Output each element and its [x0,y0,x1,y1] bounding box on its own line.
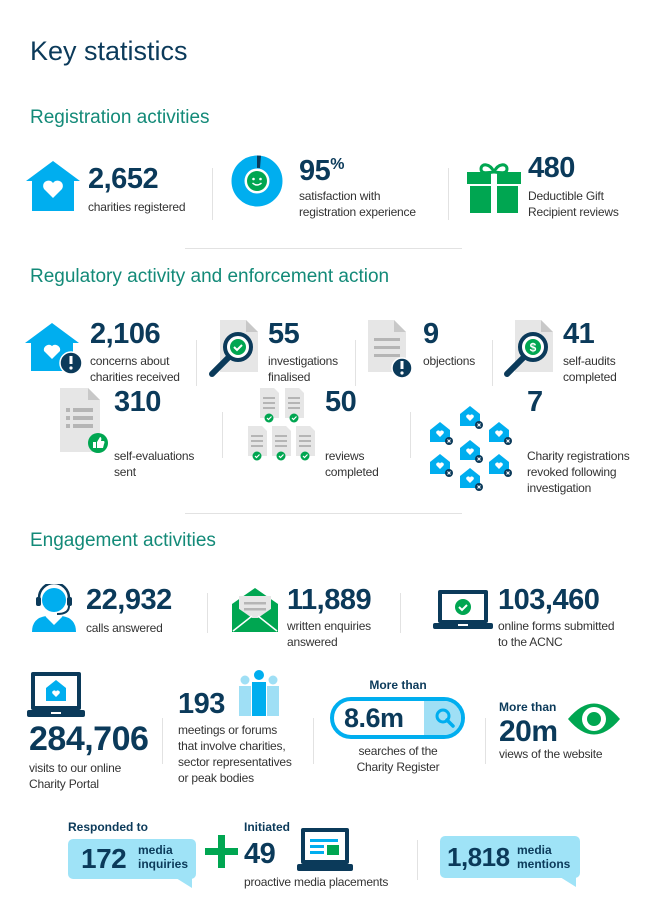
stat: 50 reviews: 50 [325,386,356,418]
icon: headset person [32,584,76,632]
heading: registration activities: Registration activities [30,107,210,128]
icon: houses cluster [430,406,512,491]
stat: 284,706 visits [27,672,148,791]
stat: 284,706 visits: Charity Portal [29,777,99,791]
icon: eye [568,704,620,734]
stat: 49 placements: 49 [244,838,275,870]
stat: 41 self-audits: self-audits [563,354,616,368]
icon: plus [205,835,238,868]
stat: 193 meetings: sector representatives [178,755,292,769]
stat: 103,460 forms: 103,460 [498,584,599,616]
stat: 193 meetings: that involve charities, [178,739,285,753]
stat: 22,932 calls: 22,932 [86,584,172,616]
stat: 1,818 media mentions: media [517,843,552,857]
stat: 193 meetings: or peak bodies [178,771,254,785]
stat: 20m views: 20m [499,715,558,748]
title: Key statistics [30,36,188,66]
stat: 310 self-evaluations: sent [114,465,136,479]
icon: laptop house [27,672,85,717]
stat: 310 self-evaluations: self-evaluations [114,449,194,463]
stat: 22,932 calls [32,584,172,635]
stat: 50 reviews: reviews [325,449,364,463]
icon: doc alert [368,320,412,378]
stat: 55 investigations: finalised [268,370,310,384]
stat: 1,818 media mentions [440,836,580,887]
icon: laptop article [297,828,353,871]
stat: 11,889 written: answered [287,635,337,649]
stat: 103,460 forms: to the ACNC [498,635,562,649]
stat: 55 investigations [209,318,338,384]
stat: 7 revoked: 7 [527,386,543,418]
heading: regulatory: Regulatory activity and enforcement action [30,266,389,287]
icon: doc magnifier dollar [504,320,553,377]
stat: 310 self-evaluations: 310 [114,386,161,418]
stat: 41 self-audits [504,318,617,384]
icon: gift [467,163,521,213]
stat: 7 revoked: revoked following [527,465,616,479]
stat: 11,889 written: written enquiries [287,619,371,633]
stat: 9 objections [368,318,475,378]
stat: 7 revoked [430,386,630,495]
stat: DGR reviews: Recipient reviews [528,205,619,219]
stat: 103,460 forms [433,584,614,649]
stat: 95% satisfaction [232,155,416,219]
stat: charities registered [26,161,185,214]
stat: 172 media inquiries: inquiries [138,857,188,871]
stat: DGR reviews: 480 [528,152,575,184]
stat: 7 revoked: investigation [527,481,591,495]
stat: 193 meetings [178,670,292,785]
stat: 2,106 concerns: concerns about [90,354,169,368]
heading: engagement: Engagement activities [30,530,216,551]
icon: people [239,670,279,716]
stat: 11,889 written: 11,889 [287,584,371,616]
stat: 49 placements [244,820,388,889]
stat: 95% satisfaction: satisfaction with [299,189,380,203]
callout bubble [68,839,196,879]
stat: 55 investigations: 55 [268,318,299,350]
stat: charities registered: charities registered [88,200,185,214]
stat: 284,706 visits: visits to our online [29,761,121,775]
stat: 2,106 concerns: charities received [90,370,180,384]
stat: 8.6m searches: More than [369,678,427,692]
stat: 50 reviews [248,386,379,479]
stat: 103,460 forms: online forms submitted [498,619,614,633]
stat: 284,706 visits: 284,706 [29,720,148,758]
stat: 172 media inquiries: Responded to [68,820,148,834]
stat: 11,889 written [232,584,371,649]
icon: doc thumbs up [60,388,108,453]
stat: 172 media inquiries [68,820,196,888]
stat: 20m views: More than [499,700,556,714]
icon: laptop check [433,590,493,629]
stat: DGR reviews: Deductible Gift [528,189,604,203]
stat: 172 media inquiries: media [138,843,173,857]
stat: 49 placements: Initiated [244,820,290,834]
icon: search pill [330,697,465,739]
stat: 49 placements: proactive media placements [244,875,388,889]
stat: 310 self-evaluations [60,386,194,479]
stat: 9 objections: objections [423,354,475,368]
callout bubble [440,836,580,878]
icon: document cluster [248,388,315,460]
icon: envelope [232,588,278,632]
icon: house with alert [25,323,82,374]
icon: doc magnifier dollar: $ [530,340,537,354]
stat: 55 investigations: investigations [268,354,338,368]
stat: 8.6m searches [330,678,465,774]
stat: charities registered: 2,652 [88,163,158,195]
stat: 50 reviews: completed [325,465,379,479]
stat: 2,106 concerns: 2,106 [90,318,160,350]
stat: 193 meetings: 193 [178,688,225,720]
stat: 7 revoked: Charity registrations [527,449,630,463]
stat: 172 media inquiries: 172 [81,843,126,874]
icon: search pill: 8.6m [344,703,404,733]
stat: DGR reviews [467,152,619,219]
stat: 9 objections: 9 [423,318,439,350]
stat: 193 meetings: meetings or forums [178,723,277,737]
stat: 20m views: views of the website [499,747,602,761]
icon: doc magnifier check [209,320,258,377]
stat: 1,818 media mentions: 1,818 [447,842,510,872]
stat: 20m views [499,700,620,761]
stat: 8.6m searches: searches of the [358,744,438,758]
stat: 8.6m searches: Charity Register [357,760,439,774]
stat: 22,932 calls: calls answered [86,621,163,635]
stat: 41 self-audits: 41 [563,318,594,350]
stat: 95% satisfaction: registration experience [299,205,416,219]
stat: 1,818 media mentions: mentions [517,857,570,871]
icon: donut smiley [232,156,282,206]
stat: 2,106 concerns [25,318,180,384]
icon: house heart [26,161,80,211]
stat: 41 self-audits: completed [563,370,617,384]
stat: 95% satisfaction: 95% [299,155,344,187]
